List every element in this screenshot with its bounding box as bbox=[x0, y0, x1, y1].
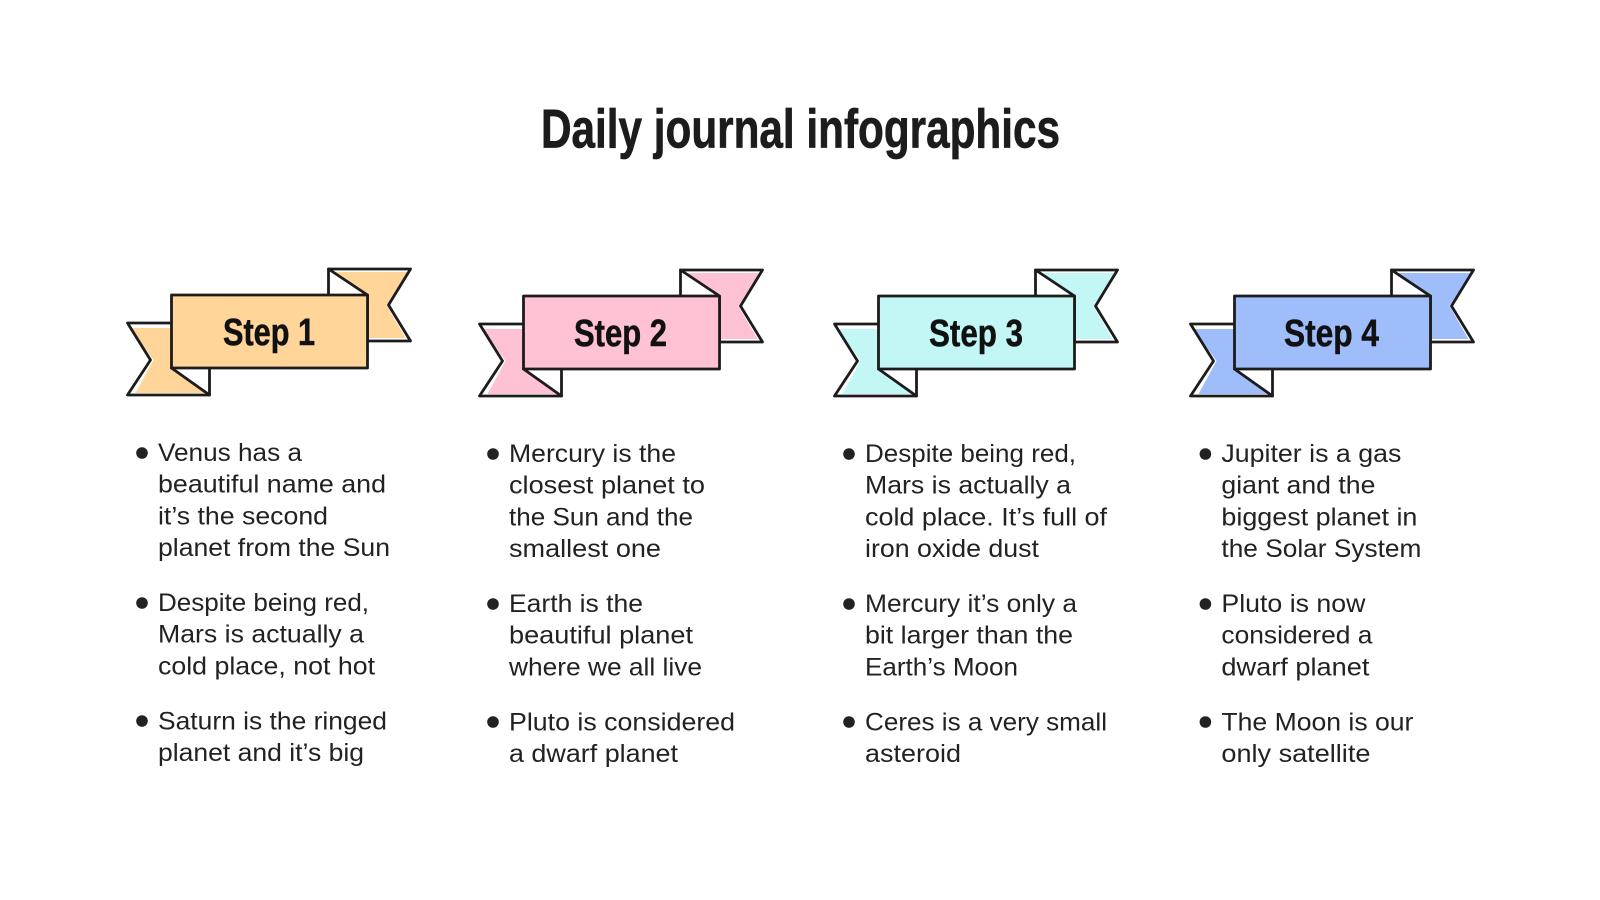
bullet: Mercury bbox=[487, 441, 705, 563]
label: Step 1 bbox=[223, 312, 315, 354]
right tail bbox=[328, 269, 410, 341]
ribbon: step 1 bbox=[128, 269, 410, 395]
bullet: Jupiter: Jupiter is a gas bbox=[1221, 441, 1401, 468]
bullet: Venus: Venus has a bbox=[158, 440, 302, 467]
bullet: Jupiter bbox=[1200, 441, 1421, 563]
bullet: Ceres: Ceres is a very small bbox=[865, 710, 1107, 736]
bullet: Mercury: smallest one bbox=[509, 536, 661, 563]
bullet: Mercury bbox=[843, 591, 1077, 681]
text block: step 2 list bbox=[487, 441, 735, 768]
label: Step 3 bbox=[929, 313, 1023, 355]
bullet: Moon: only satellite bbox=[1221, 741, 1370, 768]
bullet: Pluto: considered a bbox=[1221, 623, 1373, 650]
bullet: Saturn bbox=[136, 708, 387, 767]
bullet: Mars bbox=[843, 441, 1107, 563]
bullet: Mercury: bit larger than the bbox=[865, 623, 1073, 650]
bullet: Saturn: planet and it’s big bbox=[158, 740, 364, 767]
bullet: Mercury: Mercury it’s only a bbox=[865, 591, 1077, 618]
bullet: Moon: The Moon is our bbox=[1221, 710, 1413, 736]
bullet: Venus: it’s the second bbox=[158, 503, 328, 530]
bullet: Venus: planet from the Sun bbox=[158, 535, 390, 562]
bullet: Jupiter: biggest planet in bbox=[1221, 504, 1417, 531]
bullet: Saturn: Saturn is the ringed bbox=[158, 708, 387, 736]
label: Step 2 bbox=[574, 313, 667, 355]
bullet: Jupiter: the Solar System bbox=[1221, 536, 1421, 563]
bullet: Moon bbox=[1200, 710, 1413, 768]
bullet: Pluto: a dwarf planet bbox=[509, 741, 678, 768]
bullet: Mars: Mars is actually a bbox=[158, 622, 364, 649]
bullet: Ceres: asteroid bbox=[865, 741, 961, 768]
banner bbox=[524, 296, 720, 369]
bullet: Earth: where we all live bbox=[508, 654, 702, 681]
bullet: Mars: iron oxide dust bbox=[865, 536, 1039, 563]
bullet: Mars: cold place, not hot bbox=[158, 653, 375, 680]
bullet: Earth: beautiful planet bbox=[509, 623, 693, 650]
bullet: Earth: Earth is the bbox=[509, 591, 643, 618]
bullet: Pluto: Pluto is considered bbox=[509, 710, 735, 736]
left tail bbox=[834, 324, 916, 396]
bullet: Ceres bbox=[843, 710, 1107, 768]
bullet: Pluto: Pluto is now bbox=[1221, 591, 1366, 618]
ribbon: step 2 bbox=[480, 270, 762, 396]
bullet: Pluto: dwarf planet bbox=[1221, 654, 1370, 681]
right tail bbox=[1392, 270, 1474, 342]
bullet: Mars: cold place. It’s full of bbox=[865, 504, 1107, 531]
banner bbox=[878, 296, 1074, 369]
title: Daily journal infographics bbox=[541, 98, 1060, 160]
text block: step 4 list bbox=[1200, 441, 1421, 768]
bullet: Venus: beautiful name and bbox=[158, 472, 386, 499]
text block: step 3 list bbox=[843, 441, 1107, 768]
bullet: Pluto bbox=[1200, 591, 1373, 681]
bullet: Mercury: the Sun and the bbox=[509, 504, 693, 531]
left tail bbox=[128, 323, 210, 395]
bullet: Jupiter: giant and the bbox=[1221, 473, 1375, 500]
bullet: Pluto bbox=[487, 710, 735, 768]
right tail bbox=[680, 270, 762, 342]
ribbon: step 4 bbox=[1190, 270, 1474, 396]
bullet: Mercury: Mercury is the bbox=[509, 441, 676, 468]
bullet: Mercury: closest planet to bbox=[509, 473, 705, 500]
label: Step 4 bbox=[1284, 313, 1379, 355]
right tail bbox=[1036, 270, 1118, 342]
left tail bbox=[1190, 324, 1272, 396]
banner bbox=[172, 295, 368, 368]
bullet: Mars: Mars is actually a bbox=[865, 473, 1071, 500]
ribbon: step 3 bbox=[834, 270, 1118, 396]
bullet: Mars: Despite being red, bbox=[158, 590, 369, 617]
bullet: Mars bbox=[136, 590, 375, 680]
banner bbox=[1234, 296, 1430, 369]
text block: step 1 list bbox=[136, 440, 390, 767]
bullet: Mars: Despite being red, bbox=[865, 441, 1076, 468]
left tail bbox=[480, 324, 562, 396]
bullet: Earth bbox=[487, 591, 702, 681]
bullet: Mercury: Earth’s Moon bbox=[865, 654, 1018, 681]
bullet: Venus bbox=[136, 440, 390, 562]
